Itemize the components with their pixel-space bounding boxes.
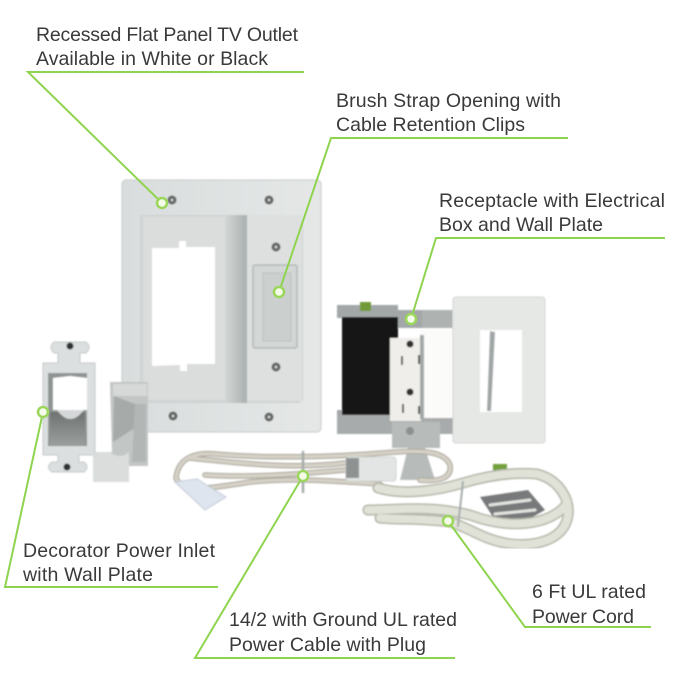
- metal bracket: [93, 382, 148, 482]
- power cable with plug: [175, 451, 450, 510]
- callout: power cable: [195, 471, 457, 658]
- callout: power cable: Power Cable with Plug: [229, 634, 426, 656]
- callout: receptacle: Box and Wall Plate: [439, 214, 603, 236]
- wall plate: [453, 297, 545, 443]
- callout: decorator power inlet: with Wall Plate: [22, 564, 153, 586]
- callout: brush strap opening: Cable Retention Clips: [336, 114, 525, 136]
- decorator power inlet with wall plate: [43, 342, 95, 472]
- callout: recessed flat panel TV outlet: [28, 24, 304, 208]
- callout: recessed flat panel TV outlet: Recessed Flat Panel TV Outlet: [36, 24, 299, 46]
- callout: power cord: 6 Ft UL rated: [532, 581, 646, 603]
- recessed TV outlet plate: [122, 180, 321, 432]
- power cord coil: [368, 464, 568, 544]
- callout: decorator power inlet: [5, 407, 218, 587]
- callout: power cable: 14/2 with Ground UL rated: [229, 609, 457, 631]
- callout: brush strap opening: [274, 90, 568, 297]
- callout: recessed flat panel TV outlet: Available in White or Black: [36, 48, 268, 70]
- callout: decorator power inlet: Decorator Power Inlet: [23, 540, 216, 562]
- callout: brush strap opening: Brush Strap Opening with: [336, 90, 561, 112]
- callout: power cord: [443, 516, 651, 628]
- electrical box and receptacle: [337, 302, 455, 480]
- callout: power cord: Power Cord: [532, 606, 634, 628]
- callout: receptacle: Receptacle with Electrical: [439, 190, 665, 212]
- callout: receptacle: [406, 190, 665, 324]
